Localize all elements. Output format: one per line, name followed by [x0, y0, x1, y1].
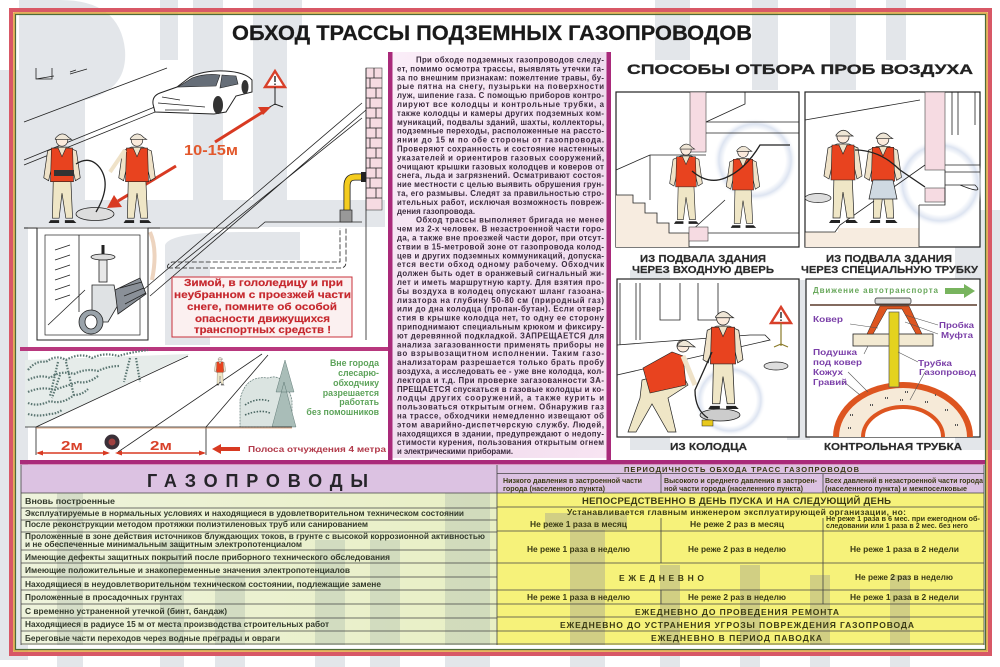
green note: разрешается — [323, 388, 379, 398]
table: pipeline types: Находящиеся в неудовлетворительном техническом состоянии, подлежащие замене — [25, 580, 382, 589]
caption: control tube: КОНТРОЛЬНАЯ ТРУБКА — [824, 441, 962, 453]
right trees illustration — [240, 360, 296, 427]
table: inspection frequency: Не реже 1 раза в 2 недели — [850, 593, 959, 602]
caption: from a well: ИЗ КОЛОДЦА — [670, 441, 747, 453]
table: pipeline types: Эксплуатируемые в нормальных условиях и находящиеся в удовлетворительном техническом состоянии — [25, 509, 464, 518]
text column: лодцы других сооружений, а также курить и — [397, 394, 604, 403]
table header — [497, 465, 984, 493]
text column: ние местности с целью выявить обрушения грун- — [397, 180, 604, 189]
icon: gate valve — [79, 245, 146, 334]
table watermark stripes — [57, 465, 490, 645]
arrow: distance 10-15 m — [107, 107, 271, 208]
table: pipeline types: Имеющие положительные и знакопеременные значения электропотенциалов — [25, 566, 350, 575]
caption: entrance door: ЧЕРЕЗ ВХОДНУЮ ДВЕРЬ — [632, 264, 774, 276]
text column: указателей и ориентиров газовых сооружений, — [397, 153, 604, 162]
table: inspection frequency: Не реже 1 раза в месяц — [530, 520, 627, 529]
traffic direction label: Движение автотранспорта — [813, 286, 939, 295]
probe hose — [692, 145, 790, 180]
icon: warning sign — [771, 307, 791, 347]
panel: route walk illustration — [24, 68, 382, 340]
caption: special tube: ЧЕРЕЗ СПЕЦИАЛЬНУЮ ТРУБКУ — [801, 264, 978, 276]
building lines — [617, 283, 770, 375]
component labels: Трубка — [918, 358, 952, 368]
dimension arrows 2 m — [36, 450, 206, 456]
text column: муникаций, подвалы зданий, шахты, коллекторы, — [397, 118, 604, 127]
yellow tube — [889, 312, 899, 387]
table watermark letters — [545, 513, 910, 645]
scorched ground edge — [150, 232, 155, 280]
component labels: Подушка — [813, 347, 857, 357]
cover — [875, 298, 911, 304]
table: inspection frequency: Не реже 1 раза в неделю — [527, 545, 630, 554]
text column: снега, льда и загрязнений. Осматривают состоя- — [397, 171, 604, 180]
table: inspection frequency: Не реже 2 раз в неделю — [688, 593, 786, 602]
table header — [21, 465, 497, 493]
text column: янии до 15 м по обе стороны от газопровода. — [397, 136, 604, 145]
text column: на трассе, обходчики немедленно извещают об — [397, 412, 604, 420]
text column: да, а также вне проезжей части дорог, при отсут- — [397, 234, 604, 242]
worker holding analyzer — [824, 130, 862, 223]
text column: стия в крышке колодца нет, то одну ее сторону — [397, 314, 605, 323]
warning callout: транспортных средств ! — [194, 324, 331, 336]
table: pipeline types: После реконструкции методом протяжки полиэтиленовых труб или санированием — [25, 520, 368, 529]
component labels: Газопровод — [919, 367, 977, 377]
valve chamber — [24, 228, 160, 340]
component labels: Гравий — [813, 377, 847, 387]
worker holding analyzer — [670, 144, 702, 224]
text column: ет, помимо осмотра трассы, выявлять утечки га- — [397, 64, 604, 73]
icon: warning sign — [265, 71, 285, 108]
panel: sampling through entrance door — [616, 92, 799, 247]
table: pipeline types: С временно устраненной утечкой (бинт, бандаж) — [25, 607, 227, 616]
table: inspection frequency: города (населенного пункта) — [503, 486, 605, 493]
panel: sampling through special tube — [805, 92, 984, 247]
table: inspection frequency: Не реже 1 раза в неделю — [527, 593, 630, 602]
text column: анализаторам разрешается только брать пробу — [397, 358, 605, 367]
text column: также колодцы и камеры других подземных ком- — [397, 109, 604, 118]
text column: лектора и т.д. При проверке загазованности ЗА- — [397, 376, 604, 385]
worker with raised probe — [726, 146, 760, 228]
label: 2 m left: 2м — [61, 438, 83, 453]
table: pipeline types: Находящиеся в радиусе 15 м от места производства строительных работ — [25, 620, 329, 629]
label: exclusion strip: Полоса отчуждения 4 метра — [248, 444, 386, 454]
arrow: strip pointer — [212, 444, 240, 454]
text column: приподнимают специальным крюком и фиксиру- — [397, 322, 604, 332]
text column: лируют все колодцы и контрольные трубки, а — [397, 100, 605, 109]
probe hose — [855, 150, 925, 187]
table: inspection frequency: ПЕРИОДИЧНОСТЬ ОБХОДА ТРАСС ГАЗОПРОВОДОВ — [624, 465, 860, 474]
text column: та, его размывы. Следят за правильностью стро- — [397, 189, 604, 198]
label: 10-15 m: 10-15м — [184, 143, 238, 159]
table: pipeline types — [21, 465, 497, 645]
table: inspection frequency: ЕЖЕДНЕВНО ДО ПРОВЕДЕНИЯ РЕМОНТА — [635, 607, 839, 617]
table: inspection frequency: Низкого давления в застроенной части — [503, 477, 642, 485]
table: inspection frequency: Не реже 1 раза в 2 недели — [850, 545, 959, 554]
text column: находящихся в здании, предупреждают о недопу- — [397, 429, 604, 438]
carpet housing — [867, 306, 922, 334]
text column: ительных работ, исключая возможность повреж- — [397, 198, 604, 207]
text column: чем из 2-х человек. В незастроенной части горо- — [397, 225, 604, 234]
green note: без помошников — [306, 407, 380, 417]
text column: цев и других подземных коммуникаций, допуска- — [397, 251, 604, 260]
warning callout — [172, 277, 352, 337]
brick wall — [366, 68, 382, 340]
green note: Вне города — [330, 358, 379, 368]
icon: car — [153, 71, 252, 114]
green note: слесарю- — [338, 368, 379, 378]
text column: бы воздуха в колодец опускают шланг газоана- — [397, 287, 604, 296]
caption: entrance door — [632, 253, 774, 276]
table: inspection frequency: ной части города (населенного пункта) — [664, 485, 803, 493]
building lines — [805, 228, 919, 247]
blue highlight circle — [713, 118, 797, 202]
component labels: Ковер — [813, 314, 843, 324]
concrete pad — [853, 334, 933, 346]
text column: Проверяют сохранность и состояние настенных — [397, 144, 605, 154]
text column: за по внешним признакам: пожелтение травы, бу- — [397, 73, 604, 82]
worker with probe hose — [110, 134, 155, 223]
text column: воздуха, а исследовать ее - уже вне колодца, кол- — [397, 367, 604, 376]
divider bar: left panels — [20, 347, 388, 351]
warning callout: опасности движущихся — [195, 313, 330, 325]
table: inspection frequency — [497, 465, 984, 645]
icon: manhole — [805, 194, 831, 202]
text column: ствии в 15-метровой зоне от газопровода колод- — [397, 242, 604, 251]
text column: рые пятна на снегу, пузырьки на поверхности — [397, 82, 604, 91]
stairs and walls — [616, 195, 689, 247]
heading: pipelines: ГАЗОПРОВОДЫ — [147, 471, 368, 491]
arrow: traffic direction — [945, 284, 975, 298]
table: inspection frequency: Не реже 2 раз в неделю — [688, 545, 786, 554]
warning callout: Зимой, в гололедицу и при — [184, 277, 343, 289]
brick pillar — [925, 92, 945, 170]
caption: special tube — [801, 253, 978, 276]
text column: анализа загазованности применять приборы не — [397, 340, 605, 349]
table: pipeline types: Вновь построенные — [25, 497, 116, 506]
icon: manhole — [76, 208, 114, 220]
warning callout: неубранном с проезжей части — [174, 289, 351, 301]
text column: подземные переходы, расположенные на рассто- — [397, 127, 604, 136]
table: inspection frequency: (населенного пункта) и межпоселковые — [825, 486, 967, 493]
blue highlight circle — [896, 139, 984, 227]
text column: и электрическими приборами. — [397, 447, 513, 456]
table: pipeline types: Проложенные в просадочных грунтах — [25, 593, 183, 602]
text column: пользоваться открытым огнем. Обнаружив газ — [397, 403, 604, 412]
ground line — [25, 427, 292, 455]
table: inspection frequency: следовании или 1 раза в 2 мес. без него — [826, 522, 968, 530]
table: pipeline types: Имеющие дефекты защитных покрытий после приборного технического обследования — [25, 553, 390, 562]
icon: pipe section — [104, 434, 120, 450]
divider bar: tables — [20, 460, 985, 464]
green note: работать — [339, 397, 380, 407]
text column: лизатора на глубину 50-80 см (природный газ) — [397, 296, 604, 305]
text column: Обход трассы выполняет бригада не менее — [416, 216, 605, 225]
text column: во взрывозащитном исполнении. Таким газо- — [397, 349, 604, 358]
table: inspection frequency: НЕПОСРЕДСТВЕННО В ДЕНЬ ПУСКА И НА СЛЕДУЮЩИЙ ДЕНЬ — [582, 495, 891, 507]
text column: ют деревянной подкладкой. ЗАПРЕЩАЕТСЯ для — [397, 331, 604, 340]
table: pipeline types: Береговые части переходов через водные преграды и овраги — [25, 634, 280, 643]
standing worker with analyzer — [703, 312, 743, 409]
panel: sampling from a well — [617, 279, 799, 437]
small walking worker — [214, 357, 226, 385]
component labels: под ковер — [813, 357, 862, 367]
brick pillar — [690, 92, 706, 152]
blue highlight circle — [694, 364, 766, 436]
caption: special tube: ИЗ ПОДВАЛА ЗДАНИЯ — [826, 253, 952, 265]
table: pipeline types: и не обеспеченные минимальным защитным электропотенциалом — [25, 540, 302, 549]
table: inspection frequency: ЕЖЕДНЕВНО ДО УСТРАНЕНИЯ УГРОЗЫ ПОВРЕЖДЕНИЯ ГАЗОПРОВОДА — [560, 620, 914, 630]
green note — [306, 358, 380, 417]
component labels — [813, 314, 977, 387]
panel: control tube diagram — [806, 279, 980, 437]
component labels: Кожух — [813, 367, 843, 377]
caption: entrance door: ИЗ ПОДВАЛА ЗДАНИЯ — [640, 253, 766, 265]
icon: manhole — [764, 362, 788, 370]
text column: ется вести обход одному рабочему. Обходчик — [397, 260, 604, 269]
heading: air sampling methods: СПОСОБЫ ОТБОРА ПРОБ ВОЗДУХА — [627, 61, 973, 77]
label: 2 m right: 2м — [150, 438, 172, 453]
table: pipeline types: Проложенные в зоне действия источников блуждающих токов, в грунте с высокой коррозионной активностью — [25, 532, 485, 541]
text column: этом аварийно-диспетчерскую службу. Людей, — [397, 420, 604, 429]
icon: yellow gas riser pipe — [340, 172, 366, 222]
green note: обходчику — [333, 378, 379, 388]
component labels: Пробка — [939, 320, 974, 330]
text column: дения газопровода. — [397, 207, 475, 216]
woman with probe — [865, 133, 901, 223]
worker with gas analyzer — [44, 134, 105, 223]
text column: При обходе подземных газопроводов следу- — [416, 56, 604, 64]
icon: manhole cover with hook — [700, 409, 740, 426]
gas main arcs — [836, 385, 970, 437]
component labels: Муфта — [941, 330, 973, 340]
warning callout: снеге, помните об особой — [187, 301, 337, 313]
text column: лет и иметь маршрутную карту. Для взятия про- — [397, 278, 604, 287]
text column: должен быть одет в оранжевый сигнальный жи- — [397, 269, 604, 278]
left forest illustration — [25, 350, 268, 452]
text column — [388, 52, 611, 460]
road and ground lines — [24, 68, 366, 296]
text column: очищают крышки газовых колодцев и коверов от — [397, 162, 604, 171]
bent worker with hose — [628, 340, 712, 432]
title: ОБХОД ТРАССЫ ПОДЗЕМНЫХ ГАЗОПРОВОДОВ — [232, 22, 752, 45]
text column: луж, шипение газа. С помощью приборов контро- — [397, 91, 604, 100]
pointer lines — [843, 315, 938, 400]
text column: или до дна колодца (пропан-бутан). Если отвер- — [397, 305, 604, 314]
table: inspection frequency: Устанавливается главным инженером эксплуатирующей организации, но: — [567, 507, 906, 517]
ground line — [810, 304, 977, 306]
text column: ПРЕЩАЕТСЯ спускаться в газовые колодцы и ко- — [397, 385, 604, 394]
table: inspection frequency: ЕЖЕДНЕВНО В ПЕРИОД ПАВОДКА — [651, 633, 822, 643]
table: inspection frequency: Не реже 2 раз в месяц — [690, 520, 784, 529]
table: inspection frequency: Не реже 1 раза в 6 мес. при ежегодном об- — [826, 515, 981, 523]
table: inspection frequency: Не реже 2 раз в неделю — [855, 573, 953, 582]
table: inspection frequency: Всех давлений в незастроенной части города — [825, 477, 983, 485]
table: inspection frequency: ЕЖЕДНЕВНО — [619, 573, 704, 583]
panel: outside city walk — [25, 350, 386, 456]
text column: стимости курения, пользования открытым огнем — [397, 438, 604, 447]
table: inspection frequency: Высокого и среднего давления в застроен- — [664, 478, 818, 485]
